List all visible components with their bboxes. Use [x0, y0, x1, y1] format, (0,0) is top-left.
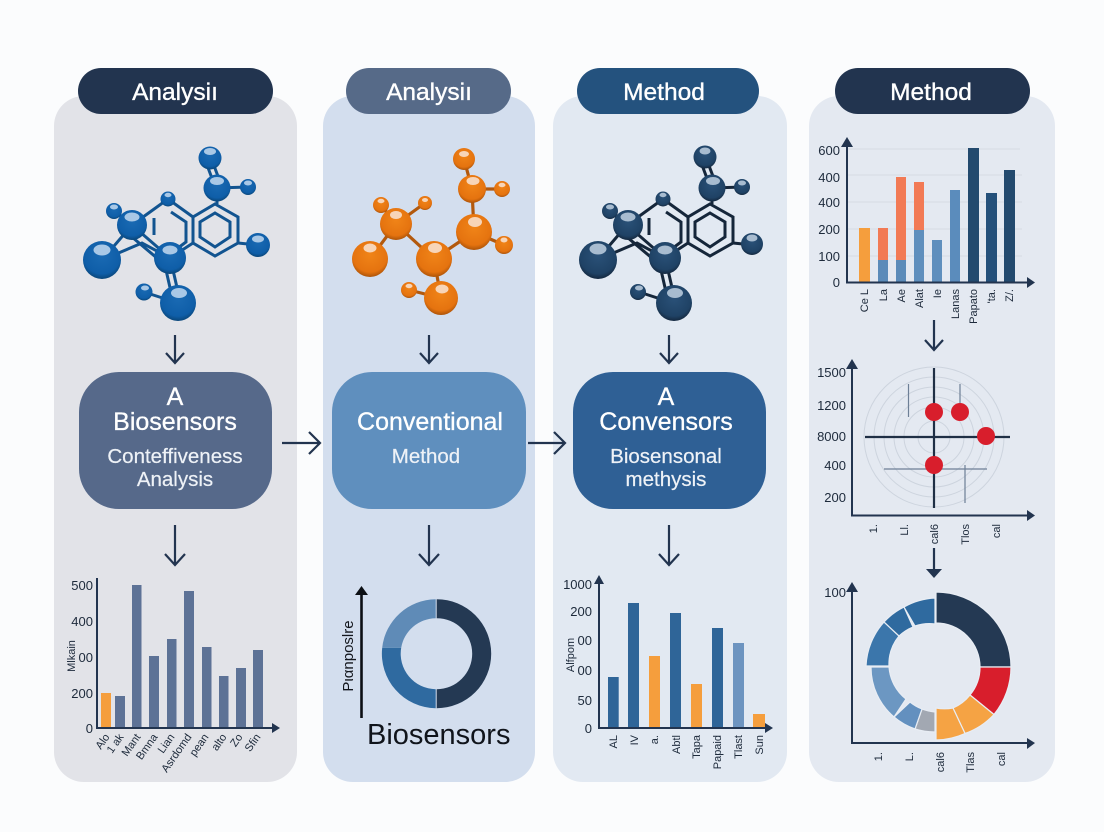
bar chart: column 4 stacked: Ae — [896, 289, 908, 302]
bar chart: column 4 stacked: 0 — [833, 275, 840, 290]
callout: biosensors cost-effectiveness box: Biosensors — [113, 408, 237, 436]
donut chart: column 2: Biosensors — [367, 719, 510, 751]
chart axes: column 4 donut: cal6 — [935, 752, 947, 772]
chart axes: column 4 donut: cal — [996, 752, 1008, 766]
bar chart: column 4 stacked: 600 — [818, 143, 840, 158]
bar chart: column 4 stacked: Z/. — [1004, 289, 1016, 302]
bar chart: column 3: IV — [629, 734, 641, 745]
bar chart: column 1: Asrdomd — [159, 732, 194, 775]
bar chart: column 4 stacked: Ie — [932, 289, 944, 298]
bar chart: column 1: 400 — [71, 614, 93, 629]
arrow: column 2 box to chart — [419, 525, 439, 565]
bar chart: column 1: 00 — [79, 650, 93, 665]
bar chart: column 1: alto — [209, 732, 229, 753]
bar chart: column 3: Abtl — [671, 735, 683, 754]
bar chart: column 4 stacked: 'ta. — [986, 289, 998, 303]
bar chart: column 1: 200 — [71, 686, 93, 701]
icon: arrow head — [926, 569, 942, 578]
heading: column 2 — [346, 68, 511, 114]
heading: column 3 — [577, 68, 759, 114]
bar chart: column 1: 1 ak — [105, 731, 127, 756]
arrow: column 3 box to chart — [659, 525, 679, 565]
bar chart: column 4 stacked: La — [878, 288, 890, 301]
bar chart: column 3: 50 — [578, 693, 592, 708]
bar chart: column 3 — [563, 575, 773, 769]
bar chart: column 4 stacked: Papato — [968, 289, 980, 324]
bar chart: column 1: Sfin — [243, 732, 263, 754]
icon: blue molecule — [83, 146, 270, 321]
radar target chart: column 4: Tlos — [960, 524, 972, 545]
bar chart: column 3: Tapa — [691, 734, 703, 759]
chart axes: column 4 donut: L. — [904, 752, 916, 761]
arrow: column 1 molecule to box — [166, 335, 184, 363]
chart axes: column 4 donut: 100 — [824, 585, 846, 600]
bar chart: column 3: a. — [649, 735, 661, 744]
radar target chart: column 4: 200 — [824, 490, 846, 505]
radar target chart: column 4: cal6 — [929, 524, 941, 544]
heading: column 1: Analysiı — [132, 79, 218, 106]
callout: conversion method box: methysis — [626, 468, 706, 491]
heading: column 1 — [78, 68, 273, 114]
bar chart: column 4 stacked: 200 — [818, 222, 840, 237]
radar target chart: column 4 — [817, 359, 1035, 545]
callout: conventional method box: Method — [392, 445, 460, 468]
bar chart: column 3: AL — [608, 735, 620, 748]
radar target chart: column 4: 1. — [868, 524, 880, 533]
donut chart: column 2: Pιαnposlre — [340, 620, 357, 692]
heading: column 4: Method — [890, 79, 972, 106]
bar chart: column 3: Papaid — [712, 735, 724, 769]
arrow: column 1 box to chart — [165, 525, 185, 565]
callout: conventional method box: Conventional — [357, 408, 503, 436]
callout: conventional method box — [332, 372, 526, 509]
donut chart: column 4 segmented — [866, 592, 1011, 740]
icon: navy molecule — [579, 146, 763, 321]
heading: column 3: Method — [623, 79, 705, 106]
callout: biosensors cost-effectiveness box: Conteffiveness — [107, 445, 243, 468]
callout: biosensors cost-effectiveness box: Analysis — [137, 468, 213, 491]
arrow: column 4 radar to donut — [933, 548, 935, 576]
callout: conversion method box: Biosensonal — [610, 445, 722, 468]
arrow: column 4 chart to radar — [925, 320, 943, 350]
bar chart: column 4 stacked: 400 — [818, 195, 840, 210]
radar target chart: column 4: 8000 — [817, 429, 846, 444]
donut chart: column 2 — [340, 586, 510, 751]
panel: column 1 background — [54, 96, 297, 782]
bar chart: column 3: 200 — [570, 604, 592, 619]
bar chart: column 1: pean — [188, 732, 211, 759]
radar target chart: column 4: Ll. — [899, 524, 911, 536]
arrow: column 3 molecule to box — [660, 335, 678, 363]
panel: column 3 background — [553, 96, 787, 782]
arrow: column 2 molecule to box — [420, 335, 438, 363]
callout: biosensors cost-effectiveness box — [79, 372, 272, 509]
bar chart: column 3: Sun — [754, 735, 766, 755]
bar chart: column 3: Alfpom — [565, 638, 577, 672]
bar chart: column 3: 0 — [585, 721, 592, 736]
chart axes: column 4 donut — [824, 582, 1035, 773]
bar chart: column 4 stacked: Lanas — [950, 289, 962, 319]
bar chart: column 1: Zo — [228, 732, 245, 749]
panel: column 2 background — [323, 96, 535, 782]
bar chart: column 4 stacked: 400 — [818, 170, 840, 185]
bar chart: column 3: Tlast — [733, 735, 745, 759]
bar chart: column 1: 500 — [71, 578, 93, 593]
bar chart: column 3: 1000 — [563, 577, 592, 592]
bar chart: column 1: 0 — [86, 721, 93, 736]
bar chart: column 1: Lian — [156, 732, 177, 756]
bar chart: column 4 stacked — [818, 137, 1035, 324]
callout: biosensors cost-effectiveness box: A — [167, 383, 184, 411]
radar target chart: column 4: 1500 — [817, 365, 846, 380]
bar chart: column 1: Bmna — [134, 731, 161, 762]
callout: conversion method box — [573, 372, 766, 509]
arrow: column 1 to column 2 — [282, 432, 320, 454]
radar target chart: column 4: 1200 — [817, 398, 846, 413]
arrow: column 2 to column 3 — [528, 432, 565, 454]
heading: column 4 — [835, 68, 1030, 114]
bar chart: column 4 stacked: Alat — [914, 289, 926, 308]
bar chart: column 1: Mant — [120, 732, 143, 759]
panel: column 4 background — [809, 96, 1055, 782]
bar chart: column 1 — [66, 578, 280, 775]
heading: column 2: Analysiı — [386, 79, 472, 106]
bar chart: column 4 stacked: Ce L — [859, 289, 871, 312]
chart axes: column 4 donut: Tlas — [965, 752, 977, 773]
radar target chart: column 4: cal — [991, 524, 1003, 538]
callout: conversion method box: A — [658, 383, 675, 411]
icon: orange molecule — [352, 148, 513, 315]
bar chart: column 1: Mlkain — [66, 640, 78, 672]
bar chart: column 1: Alo — [94, 732, 112, 752]
bar chart: column 4 stacked: 100 — [818, 249, 840, 264]
bar chart: column 3: 00 — [578, 633, 592, 648]
chart axes: column 4 donut: 1. — [873, 752, 885, 761]
radar target chart: column 4: 400 — [824, 458, 846, 473]
callout: conversion method box: Convensors — [599, 408, 733, 436]
bar chart: column 3: 00 — [578, 663, 592, 678]
